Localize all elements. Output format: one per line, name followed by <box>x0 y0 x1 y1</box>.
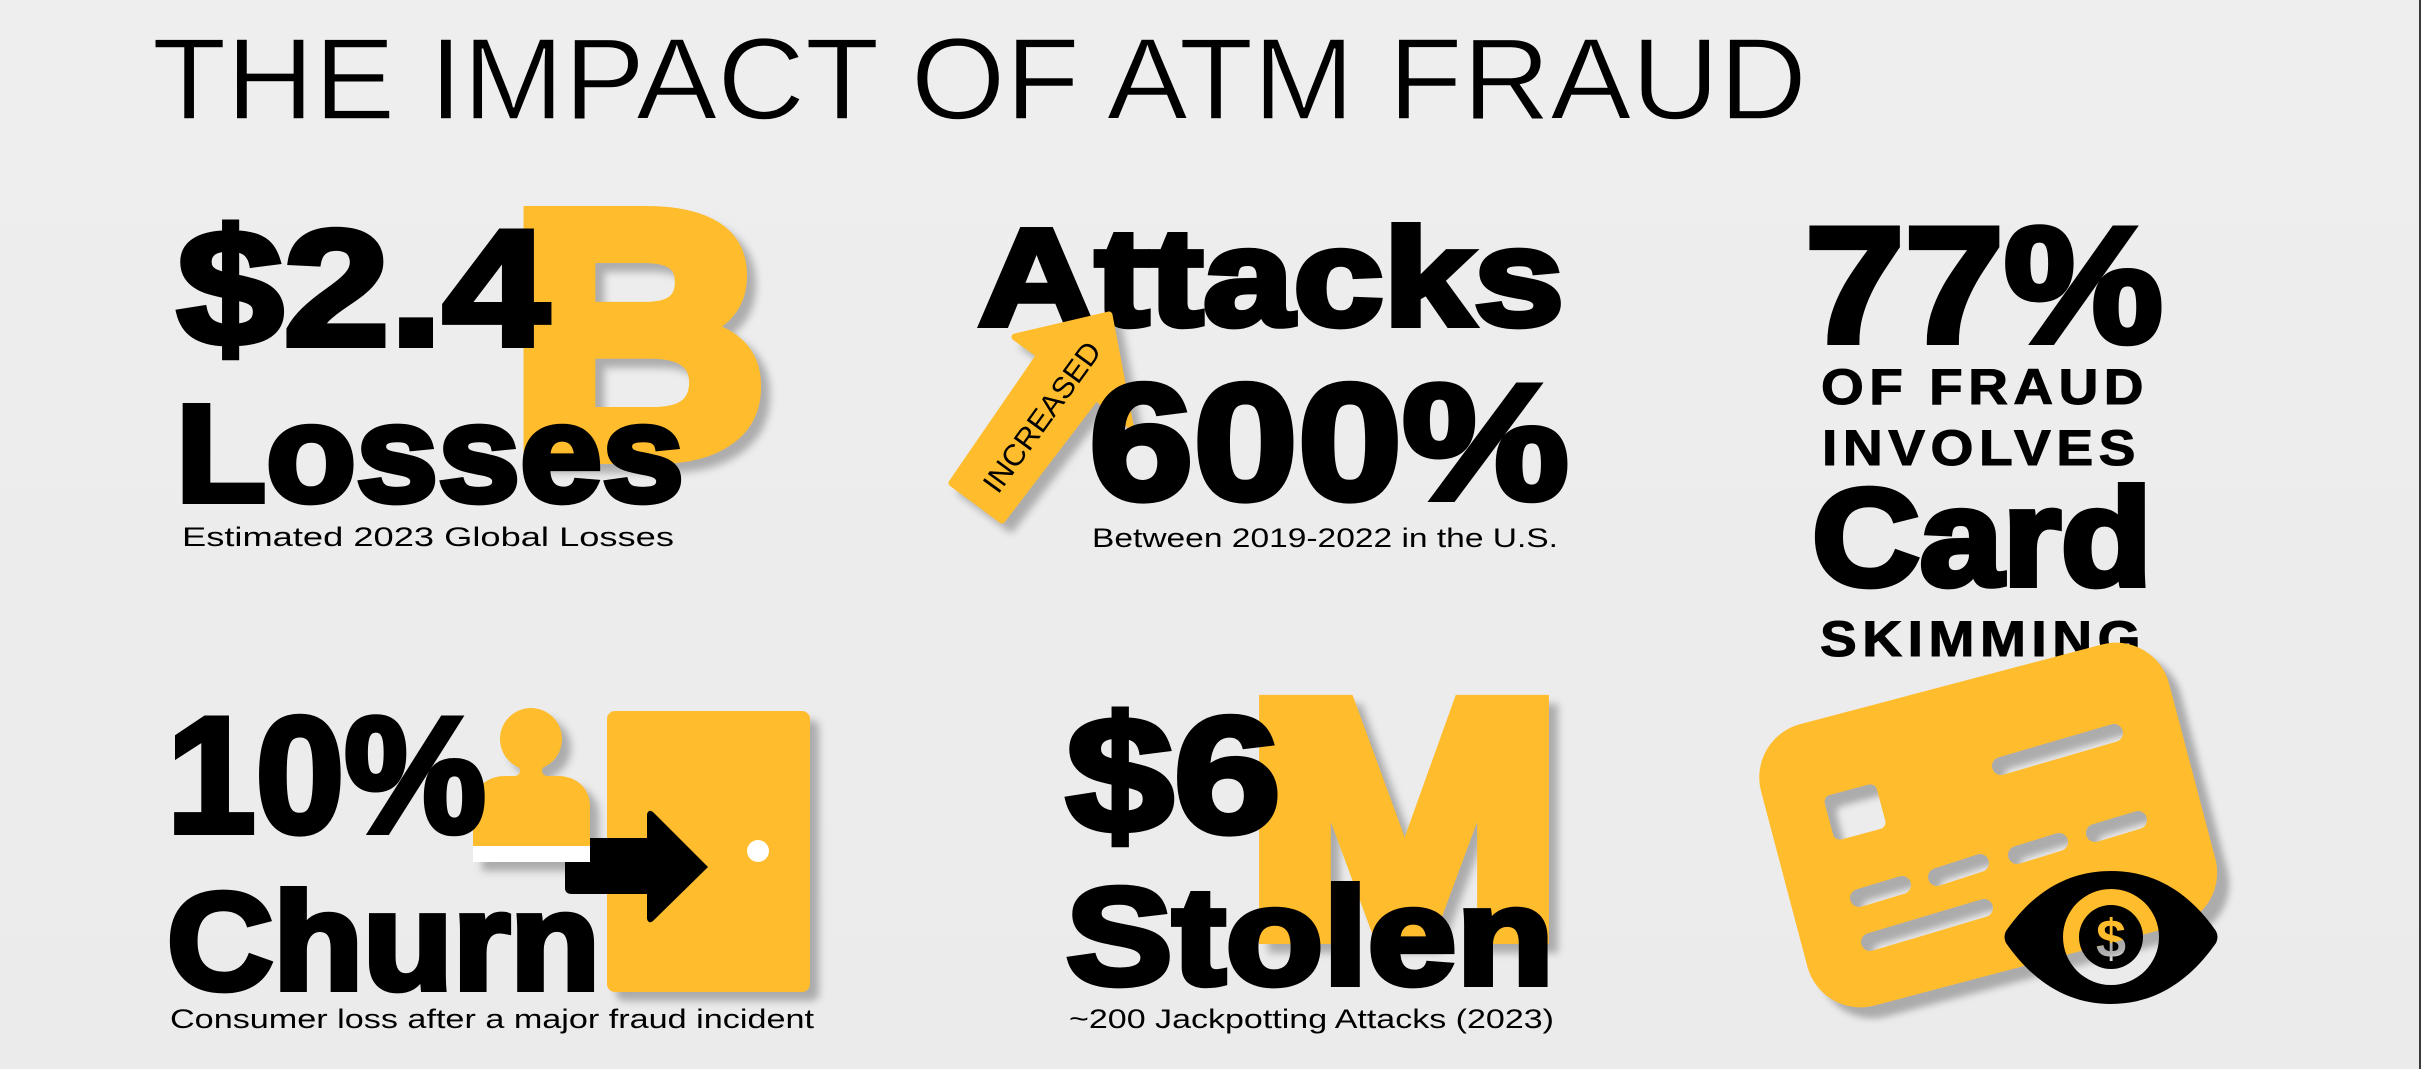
stat: $2.4: $2.4 <box>177 196 549 380</box>
caption: consumer loss: Consumer loss after a major fraud incident <box>170 1004 815 1034</box>
heading: Churn: Churn <box>167 865 600 1019</box>
panel: card skimming <box>1747 193 2229 1020</box>
heading: Attacks: Attacks <box>978 201 1564 355</box>
right edge line <box>2419 0 2421 1069</box>
icon: eye with dollar <box>2004 871 2218 1004</box>
icon: person <box>473 708 590 862</box>
heading: Card: Card <box>1812 461 2152 615</box>
icon: credit card <box>1747 630 2229 1020</box>
arrow: increased: INCREASED <box>977 336 1108 499</box>
heading: Stolen: Stolen <box>1066 860 1554 1014</box>
stat: $6: $6 <box>1066 683 1281 867</box>
stat: 77%: 77% <box>1805 193 2163 377</box>
stat: 600%: 600% <box>1089 350 1569 534</box>
heading: Losses: Losses <box>176 377 684 531</box>
panel: attacks increased <box>952 201 1569 553</box>
panel: jackpotting theft <box>1066 633 1563 1034</box>
icon: door knob <box>747 840 769 862</box>
text: involves: INVOLVES <box>1822 420 2141 476</box>
text: skimming: SKIMMING <box>1820 611 2146 667</box>
icon: door <box>607 711 810 992</box>
panel: global losses <box>176 142 767 552</box>
title: THE IMPACT OF ATM FRAUD <box>152 14 1807 144</box>
text: of fraud: OF FRAUD <box>1821 359 2149 415</box>
caption: date range: Between 2019-2022 in the U.S. <box>1092 523 1558 553</box>
panel: consumer churn <box>167 683 815 1034</box>
icon: exit arrow <box>565 811 708 922</box>
caption: jackpotting attacks: ~200 Jackpotting Attacks (2023) <box>1069 1004 1554 1034</box>
yellow letter M: M <box>1245 633 1563 1005</box>
arrow: increased <box>952 315 1130 520</box>
caption: global losses: Estimated 2023 Global Losses <box>182 522 674 552</box>
stat: 10%: 10% <box>167 683 486 867</box>
yellow letter B: B <box>510 142 767 528</box>
